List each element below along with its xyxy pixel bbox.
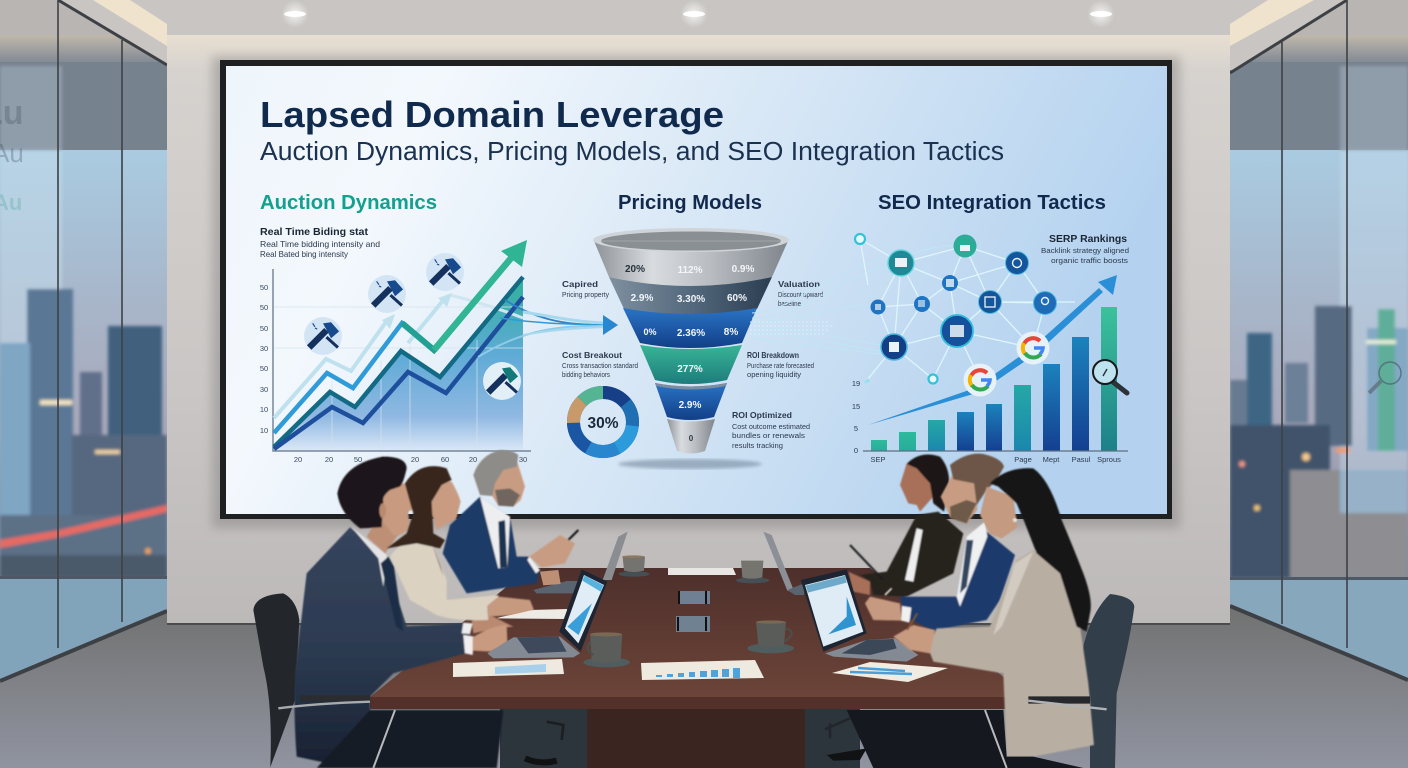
network edges: [860, 239, 1075, 380]
laptop back left: [533, 532, 628, 593]
silver tip: [667, 419, 715, 454]
document mid-left: [497, 609, 567, 618]
auction note text: Real Time Biding stat: [260, 226, 368, 238]
x axis labels: 60: [441, 455, 449, 464]
x axis labels: Pasul: [1072, 455, 1091, 464]
subtitle: Auction Dynamics, Pricing Models, and SEO Integration Tactics: [260, 138, 1004, 166]
right glass wall with city reflection: [1230, 0, 1408, 680]
coffee cup back right: [736, 561, 769, 583]
person: woman front right: [893, 468, 1094, 757]
seo note text: [1041, 234, 1129, 265]
heading: seo integration tactics: SEO Integration Tactics: [878, 192, 1106, 214]
person: woman back right: [848, 455, 963, 597]
seo network diagram: [750, 234, 1075, 384]
funnel rim: [593, 228, 789, 252]
label: roi breakdown: opening liquidity: [747, 372, 802, 379]
auction note text: [260, 226, 380, 259]
hands on back left laptop: [540, 570, 561, 585]
laptop base: [487, 637, 580, 658]
y axis labels: 50: [260, 283, 268, 292]
table pedestal: [587, 709, 805, 768]
y axis labels: 10: [260, 405, 268, 414]
front document centre: [641, 660, 764, 680]
silver top band: [594, 241, 788, 286]
x axis labels: 20: [294, 455, 302, 464]
seo note text: Backlink strategy aligned: [1041, 246, 1129, 255]
x axis labels: [294, 455, 527, 464]
donut chart: [574, 392, 632, 452]
auction note text: Real Bated bing intensity: [260, 249, 349, 259]
funnel percentages: 2.9%: [631, 293, 654, 304]
hammer icon 1: [304, 317, 342, 355]
x axis labels: Page: [1014, 455, 1032, 464]
person: woman left centre: [387, 466, 534, 620]
faint reflected letters: [0, 106, 22, 210]
label: roi optimized: ROI Optimized: [732, 410, 792, 420]
label: roi breakdown: [747, 350, 814, 379]
label: roi optimized: results tracking: [732, 443, 783, 450]
under-table shadow: [500, 709, 860, 768]
label: cost breakout: Cross transaction standard: [562, 363, 638, 370]
funnel percentages: 8%: [724, 327, 738, 338]
x axis labels: Sprous: [1097, 455, 1121, 464]
flow streams into funnel: [478, 300, 606, 357]
table top: [370, 568, 1028, 697]
arrow into funnel: [603, 315, 618, 335]
label: capped: Capired: [562, 279, 598, 289]
laptop front right: [801, 569, 918, 662]
growth arrow head: [501, 240, 527, 267]
label: valuation: Discount upward: [778, 292, 823, 299]
label: cost breakout: Cost Breakout: [562, 350, 622, 360]
coffee cup front right: [747, 620, 794, 653]
chart axes: [273, 269, 531, 451]
y axis labels: 15: [852, 402, 860, 411]
funnel percentages: 112%: [677, 265, 703, 276]
auction note text: Real Time bidding intensity and: [260, 239, 380, 249]
label: cost breakout: bidding behaviors: [562, 372, 610, 379]
table front edge: [370, 697, 1028, 709]
google badge 2: [964, 364, 996, 396]
person: man back left: [443, 450, 578, 593]
y axis labels: 10: [260, 426, 268, 435]
y axis labels: 50: [260, 303, 268, 312]
x axis labels: 20: [325, 455, 333, 464]
y axis labels: 19: [852, 379, 860, 388]
right chair: [1082, 594, 1134, 768]
funnel percentages: 20%: [625, 264, 645, 275]
far document: [668, 568, 736, 575]
table outlet 1: [678, 591, 710, 604]
google badge 1: [1016, 332, 1050, 364]
y axis labels: [852, 379, 860, 455]
series lines: [274, 257, 523, 449]
label: valuation: baseline: [778, 301, 801, 308]
funnel shadow: [618, 459, 762, 469]
left chair: [253, 593, 299, 768]
back wall: [167, 35, 1230, 625]
laptop base: [825, 638, 918, 662]
x axis labels: 20: [469, 455, 477, 464]
y axis labels: 50: [260, 324, 268, 333]
person: man front left: [294, 457, 513, 768]
laptop front left: [487, 569, 607, 658]
coffee cup front left: [583, 632, 630, 667]
floor: [0, 600, 1408, 768]
label: roi optimized: Cost outcome estimated: [732, 424, 810, 431]
x axis labels: Mept: [1043, 455, 1060, 464]
node group: [855, 234, 1056, 384]
lower body right group: [825, 700, 1107, 768]
x axis labels: [870, 455, 1121, 464]
y axis labels: [260, 283, 268, 435]
laptop screen: [559, 569, 607, 652]
y axis labels: 5: [854, 424, 858, 433]
funnel percentages: 3.30%: [677, 294, 705, 305]
label: roi optimized: bundles or renewals: [732, 433, 806, 440]
hammer icon 4: [483, 362, 521, 400]
magnifier icon: [1093, 360, 1127, 393]
auction line chart: [260, 240, 531, 464]
funnel percentages: 0%: [643, 327, 657, 337]
funnel percentages: [625, 264, 755, 443]
laptop screen: [801, 569, 867, 652]
bars: [871, 307, 1117, 451]
conference table: [370, 568, 1028, 768]
y axis labels: 50: [260, 364, 268, 373]
x axis labels: 50: [381, 455, 389, 464]
blue band: [623, 308, 757, 348]
laptop back right: [763, 532, 804, 595]
y axis labels: 30: [260, 385, 268, 394]
label: roi breakdown: Purchase rate forecasted: [747, 363, 814, 370]
hammer icon 2: [368, 275, 406, 313]
chart area fill: [274, 277, 523, 451]
document under woman: [497, 609, 567, 619]
left chair arm and base: [278, 698, 563, 768]
donut value: 30%: [587, 415, 619, 432]
label: valuation: [778, 279, 823, 308]
table outlet 2: [676, 616, 710, 632]
title: Lapsed Domain Leverage: [260, 94, 724, 135]
seo note text: organic traffic boosts: [1051, 256, 1128, 265]
x axis labels: 50: [354, 455, 362, 464]
seo note text: SERP Rankings: [1049, 234, 1127, 245]
lower blue band: [655, 383, 727, 420]
label: roi optimized: [732, 410, 810, 450]
funnel percentages: 0: [689, 434, 694, 443]
coffee cup back left: [618, 555, 650, 577]
ranking bar chart: [852, 275, 1128, 464]
slate band: [609, 277, 772, 316]
left window frame: [0, 0, 167, 681]
x axis labels: SEP: [870, 455, 886, 464]
front document left: [453, 659, 564, 677]
funnel percentages: 277%: [677, 364, 703, 375]
front document right: [832, 662, 948, 682]
label: cost breakout: [562, 350, 638, 379]
funnel percentages: 2.36%: [677, 328, 705, 339]
label: capped: Pricing property: [562, 292, 609, 299]
ceiling light left: [281, 0, 309, 28]
y axis labels: 30: [260, 344, 268, 353]
right window frame: [1230, 0, 1408, 680]
trend arrow: [868, 275, 1117, 425]
bar axis: [863, 450, 1128, 452]
funnel percentages: 2.9%: [679, 400, 702, 411]
ceiling light centre: [680, 0, 708, 28]
x axis labels: 30: [519, 455, 527, 464]
heading: auction dynamics: Auction Dynamics: [260, 192, 437, 214]
label: valuation: Valuation: [778, 279, 820, 289]
label: capped: [562, 279, 609, 299]
presentation screen: [220, 60, 1172, 519]
y axis labels: 0: [854, 446, 858, 455]
x axis labels: 20: [411, 455, 419, 464]
teal band: [640, 345, 742, 384]
label: roi breakdown: ROI Breakdown: [747, 350, 799, 360]
ceiling light right: [1087, 0, 1115, 28]
funnel percentages: 60%: [727, 293, 747, 304]
funnel chart: [593, 228, 789, 469]
hammer icon 3: [426, 253, 464, 291]
ceiling: [0, 0, 1408, 70]
network streams: [750, 244, 965, 355]
left glass wall with city reflection: [0, 0, 167, 680]
funnel percentages: 0.9%: [732, 264, 755, 275]
heading: pricing models: Pricing Models: [618, 192, 762, 214]
person: man right centre: [865, 454, 1015, 631]
